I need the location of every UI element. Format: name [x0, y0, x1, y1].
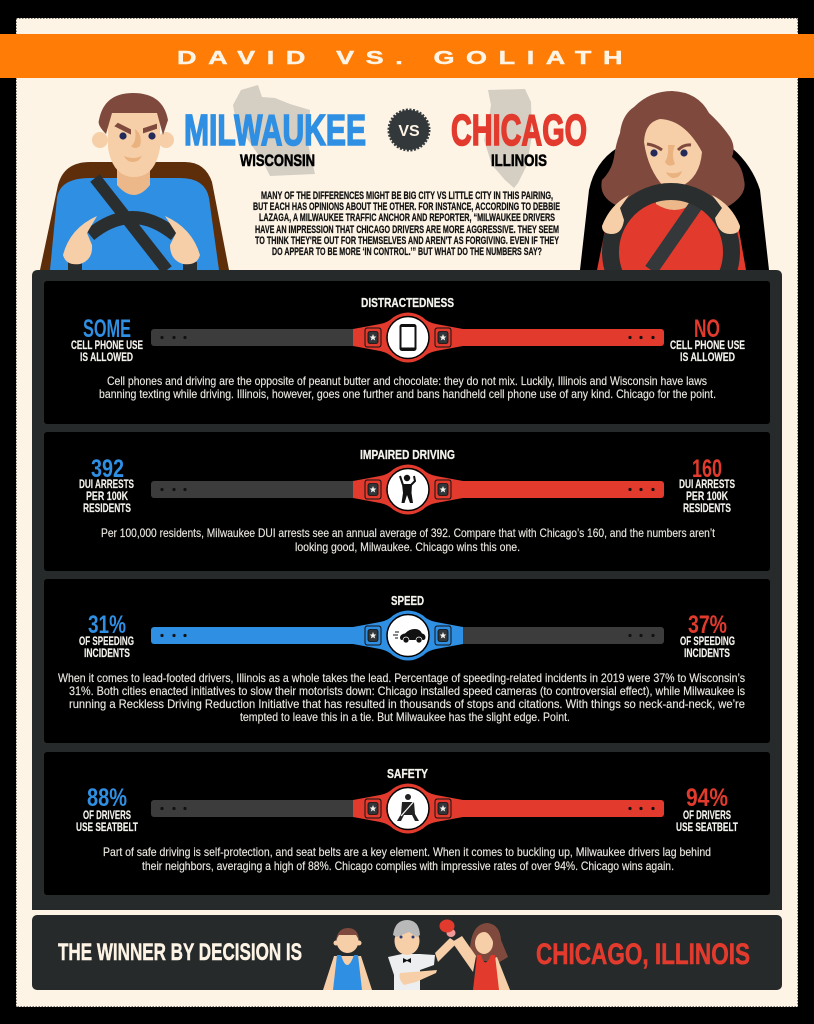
figure: referee: [388, 920, 457, 990]
panel: winner: [32, 915, 782, 990]
icon: boxing glove: [440, 920, 456, 937]
title banner: [0, 34, 814, 78]
icon: impaired figure: [400, 475, 415, 503]
stat: Milwaukee cell phone use: CELL PHONE USE: [71, 338, 143, 352]
heading: Milwaukee: MILWAUKEE: [184, 106, 366, 155]
badge: vs: VS: [398, 123, 420, 140]
stat: Milwaukee seatbelt: 88%: [87, 784, 127, 812]
text: speed: [58, 671, 745, 724]
stat: Chicago DUI arrests: PER 100K: [686, 489, 728, 503]
driver: Chicago woman: [580, 91, 769, 312]
stat: Chicago seatbelt: [676, 784, 738, 834]
heading: impaired driving: IMPAIRED DRIVING: [360, 447, 455, 462]
intro paragraph: TO THINK THEY'RE OUT FOR THEMSELVES AND AREN'T AS FORGIVING. EVEN IF THEY: [255, 235, 559, 247]
text: impaired driving: Per 100,000 residents, Milwaukee DUI arrests see an annual average of 392. Compare that with Chicago’s 160, and the numbers aren’t: [101, 526, 716, 540]
heading: safety: SAFETY: [387, 766, 428, 781]
stat: Milwaukee speeding: [79, 611, 134, 660]
figure: winner: [452, 923, 510, 990]
belt: Chicago wins: [151, 784, 664, 834]
heading: Milwaukee: WISCONSIN: [240, 151, 315, 170]
intro paragraph: HAVE AN IMPRESSION THAT CHICAGO DRIVERS ARE MORE AGGRESSIVE. THEY SEEM: [255, 224, 559, 236]
figure: loser: [323, 928, 372, 990]
stat: Chicago DUI arrests: [679, 455, 735, 515]
heading: Milwaukee: [184, 106, 366, 170]
stat: Milwaukee speeding: INCIDENTS: [84, 646, 130, 660]
stat: Milwaukee speeding: 31%: [88, 611, 126, 639]
belt: Milwaukee wins: [151, 610, 664, 660]
stat: Chicago speeding: 37%: [688, 611, 727, 639]
stat: Chicago cell phone use: CELL PHONE USE: [670, 338, 745, 352]
stat: Chicago cell phone use: NO: [694, 315, 720, 343]
text: winner label: THE WINNER BY DECISION IS: [58, 939, 302, 966]
text: impaired driving: [101, 526, 716, 554]
intro paragraph: [253, 190, 560, 258]
map: Illinois: [484, 89, 532, 188]
icon: phone: [400, 324, 416, 351]
text: safety: [103, 845, 711, 873]
panel: safety: [44, 752, 770, 895]
text: speed: running a Reckless Driving Reduction Initiative that has resulted in thousands of stops and citations. With things so neck-and-neck, we’re: [69, 697, 745, 711]
belt: Chicago wins: [151, 464, 664, 514]
text: winner name: CHICAGO, ILLINOIS: [536, 938, 750, 971]
stat: Milwaukee DUI arrests: RESIDENTS: [83, 501, 131, 515]
icon: speeding car: [393, 629, 426, 643]
intro paragraph: BUT EACH HAS OPINIONS ABOUT THE OTHER. FOR INSTANCE, ACCORDING TO DEBBIE: [253, 201, 560, 213]
stat: Chicago cell phone use: [670, 315, 745, 364]
stat: Milwaukee cell phone use: SOME: [83, 315, 131, 343]
text: distractedness: [99, 374, 716, 401]
stat: Chicago seatbelt: OF DRIVERS: [683, 808, 731, 822]
stat: Milwaukee seatbelt: OF DRIVERS: [83, 808, 131, 822]
text: distractedness: Cell phones and driving are the opposite of peanut butter and chocolate: they do not mix. Luckily, Illinois and Wisconsin have laws: [107, 374, 707, 388]
stat: Chicago DUI arrests: RESIDENTS: [683, 501, 731, 515]
map: Wisconsin: [233, 85, 315, 176]
heading: Chicago: [451, 106, 587, 170]
text: impaired driving: looking good, Milwaukee. Chicago wins this one.: [295, 540, 520, 554]
intro paragraph: MANY OF THE DIFFERENCES MIGHT BE BIG CITY VS LITTLE CITY IN THIS PAIRING,: [261, 190, 553, 202]
stat: Chicago DUI arrests: 160: [692, 455, 722, 483]
text: speed: When it comes to lead-footed drivers, Illinois as a whole takes the lead. Percentage of speeding-related incidents in 2019 were 37% to Wisconsin’s: [58, 671, 745, 685]
stat: Chicago speeding: INCIDENTS: [684, 646, 730, 660]
panel: distractedness: [44, 281, 770, 424]
intro paragraph: LAZAGA, A MILWAUKEE TRAFFIC ANCHOR AND REPORTER, “MILWAUKEE DRIVERS: [259, 212, 555, 224]
stat: Milwaukee DUI arrests: PER 100K: [86, 489, 128, 503]
stat: Chicago seatbelt: 94%: [686, 784, 728, 812]
stat: Chicago seatbelt: USE SEATBELT: [676, 820, 738, 834]
stat: Chicago cell phone use: IS ALLOWED: [680, 350, 735, 364]
heading: distractedness: DISTRACTEDNESS: [361, 295, 454, 310]
panel: speed: [44, 579, 770, 743]
stat: Milwaukee cell phone use: IS ALLOWED: [80, 350, 133, 364]
stat: Chicago speeding: [680, 611, 735, 660]
stat: Chicago speeding: OF SPEEDING: [680, 634, 735, 648]
stat: Milwaukee DUI arrests: [79, 455, 134, 515]
stat: Milwaukee cell phone use: [71, 315, 143, 364]
stat: Milwaukee DUI arrests: DUI ARRESTS: [79, 477, 134, 491]
comparison backing panel: [32, 270, 782, 910]
belt: Chicago wins: [151, 312, 664, 362]
text: speed: 31%. Both cities enacted initiatives to slow their motorists down: Chicago installed speed cameras (to controversial effect), while Milwaukee is: [69, 684, 745, 698]
stat: Milwaukee DUI arrests: 392: [91, 455, 124, 483]
stat: Chicago DUI arrests: DUI ARRESTS: [679, 477, 735, 491]
badge: vs: [389, 110, 429, 150]
stat: Milwaukee speeding: OF SPEEDING: [79, 634, 134, 648]
heading: speed: SPEED: [391, 593, 424, 608]
text: speed: tempted to leave this in a tie. But Milwaukee has the slight edge. Point.: [240, 710, 570, 724]
text: distractedness: banning texting while driving. Illinois, however, goes one further and bans handheld cell phone use of any kind. Chicago for the point.: [99, 387, 716, 401]
icon: seatbelt: [397, 794, 419, 821]
stat: Milwaukee seatbelt: [76, 784, 138, 834]
text: safety: their neighbors, averaging a high of 88%. Chicago complies with impressive rates of over 94%. Chicago wins again.: [142, 859, 674, 873]
title banner: DAVID VS. GOLIATH: [177, 48, 622, 68]
panel: impaired driving: [44, 432, 770, 571]
driver: Milwaukee man: [40, 93, 229, 270]
text: safety: Part of safe driving is self-protection, and seat belts are a key element. When it comes to buckling up, Milwaukee drivers lag behind: [103, 845, 711, 859]
heading: Chicago: ILLINOIS: [491, 151, 547, 170]
heading: Chicago: CHICAGO: [451, 106, 587, 155]
stat: Milwaukee seatbelt: USE SEATBELT: [76, 820, 138, 834]
intro paragraph: DO APPEAR TO BE MORE ‘IN CONTROL.’” BUT WHAT DO THE NUMBERS SAY?: [272, 246, 542, 258]
